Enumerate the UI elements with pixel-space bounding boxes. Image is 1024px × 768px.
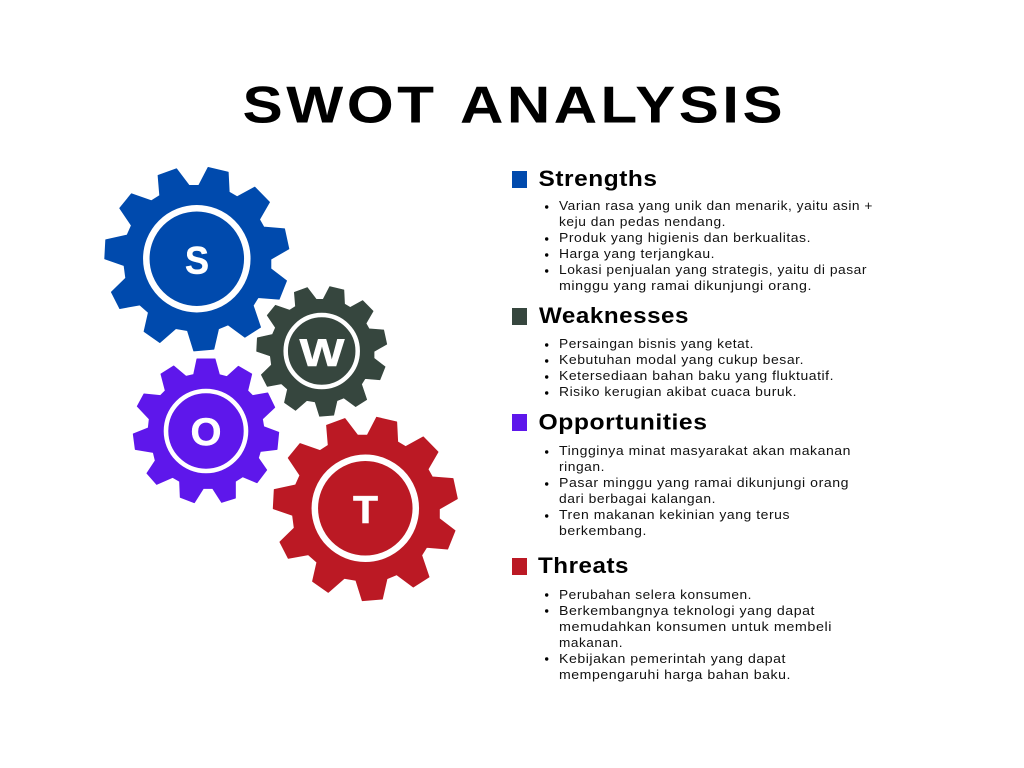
marker: threats (512, 558, 527, 575)
gear: W: W (300, 332, 345, 375)
list: strengths: Varian rasa yang unik dan menarik, yaitu asin + (559, 198, 873, 213)
list: strengths: minggu yang ramai dikunjungi orang. (559, 278, 812, 293)
heading: opportunities: Opportunities (538, 410, 708, 434)
list: opportunities: dari berbagai kalangan. (559, 491, 716, 506)
list: threats: memudahkan konsumen untuk membeli (559, 619, 832, 634)
list: opportunities: Pasar minggu yang ramai dikunjungi orang (559, 475, 849, 490)
panel: weaknesses (512, 303, 834, 399)
list: opportunities: berkembang. (559, 523, 647, 538)
marker: weaknesses (512, 308, 527, 325)
list: threats: makanan. (559, 635, 623, 650)
list: weaknesses: Ketersediaan bahan baku yang fluktuatif. (559, 368, 834, 383)
list: threats: Berkembangnya teknologi yang dapat (559, 603, 815, 618)
panel: opportunities (512, 410, 851, 538)
list: opportunities: ringan. (559, 459, 605, 474)
title: ANALYSIS (460, 77, 786, 135)
list: weaknesses: Persaingan bisnis yang ketat. (559, 336, 754, 351)
list: threats (545, 587, 832, 682)
marker: strengths (512, 171, 527, 188)
panel: strengths (512, 166, 873, 293)
gear diagram (105, 168, 457, 601)
list: strengths: Lokasi penjualan yang strategis, yaitu di pasar (559, 262, 867, 277)
list: strengths: Harga yang terjangkau. (559, 246, 715, 261)
list: threats: Perubahan selera konsumen. (559, 587, 752, 602)
list: opportunities: Tingginya minat masyarakat akan makanan (559, 443, 851, 458)
gear: S: S (185, 240, 209, 282)
list: strengths: keju dan pedas nendang. (559, 214, 726, 229)
gear: O (133, 359, 279, 503)
gear: O: O (190, 411, 222, 454)
list: weaknesses (545, 336, 834, 399)
heading: threats: Threats (538, 553, 629, 578)
gear: W (257, 287, 387, 416)
list: opportunities (545, 443, 851, 538)
list: weaknesses: Kebutuhan modal yang cukup besar. (559, 352, 804, 367)
list: threats: mempengaruhi harga bahan baku. (559, 667, 791, 682)
gear: S (105, 168, 289, 351)
gear: T: T (353, 489, 378, 532)
list: weaknesses: Risiko kerugian akibat cuaca buruk. (559, 384, 797, 399)
gear: T (273, 417, 457, 601)
title: SWOT (242, 77, 438, 135)
list: strengths: Produk yang higienis dan berkualitas. (559, 230, 811, 245)
list: strengths (545, 198, 873, 293)
title (242, 77, 786, 135)
panel: threats (512, 553, 832, 682)
list: threats: Kebijakan pemerintah yang dapat (559, 651, 786, 666)
heading: strengths: Strengths (538, 166, 658, 191)
heading: weaknesses: Weaknesses (539, 303, 689, 328)
marker: opportunities (512, 414, 527, 431)
list: opportunities: Tren makanan kekinian yang terus (559, 507, 790, 522)
